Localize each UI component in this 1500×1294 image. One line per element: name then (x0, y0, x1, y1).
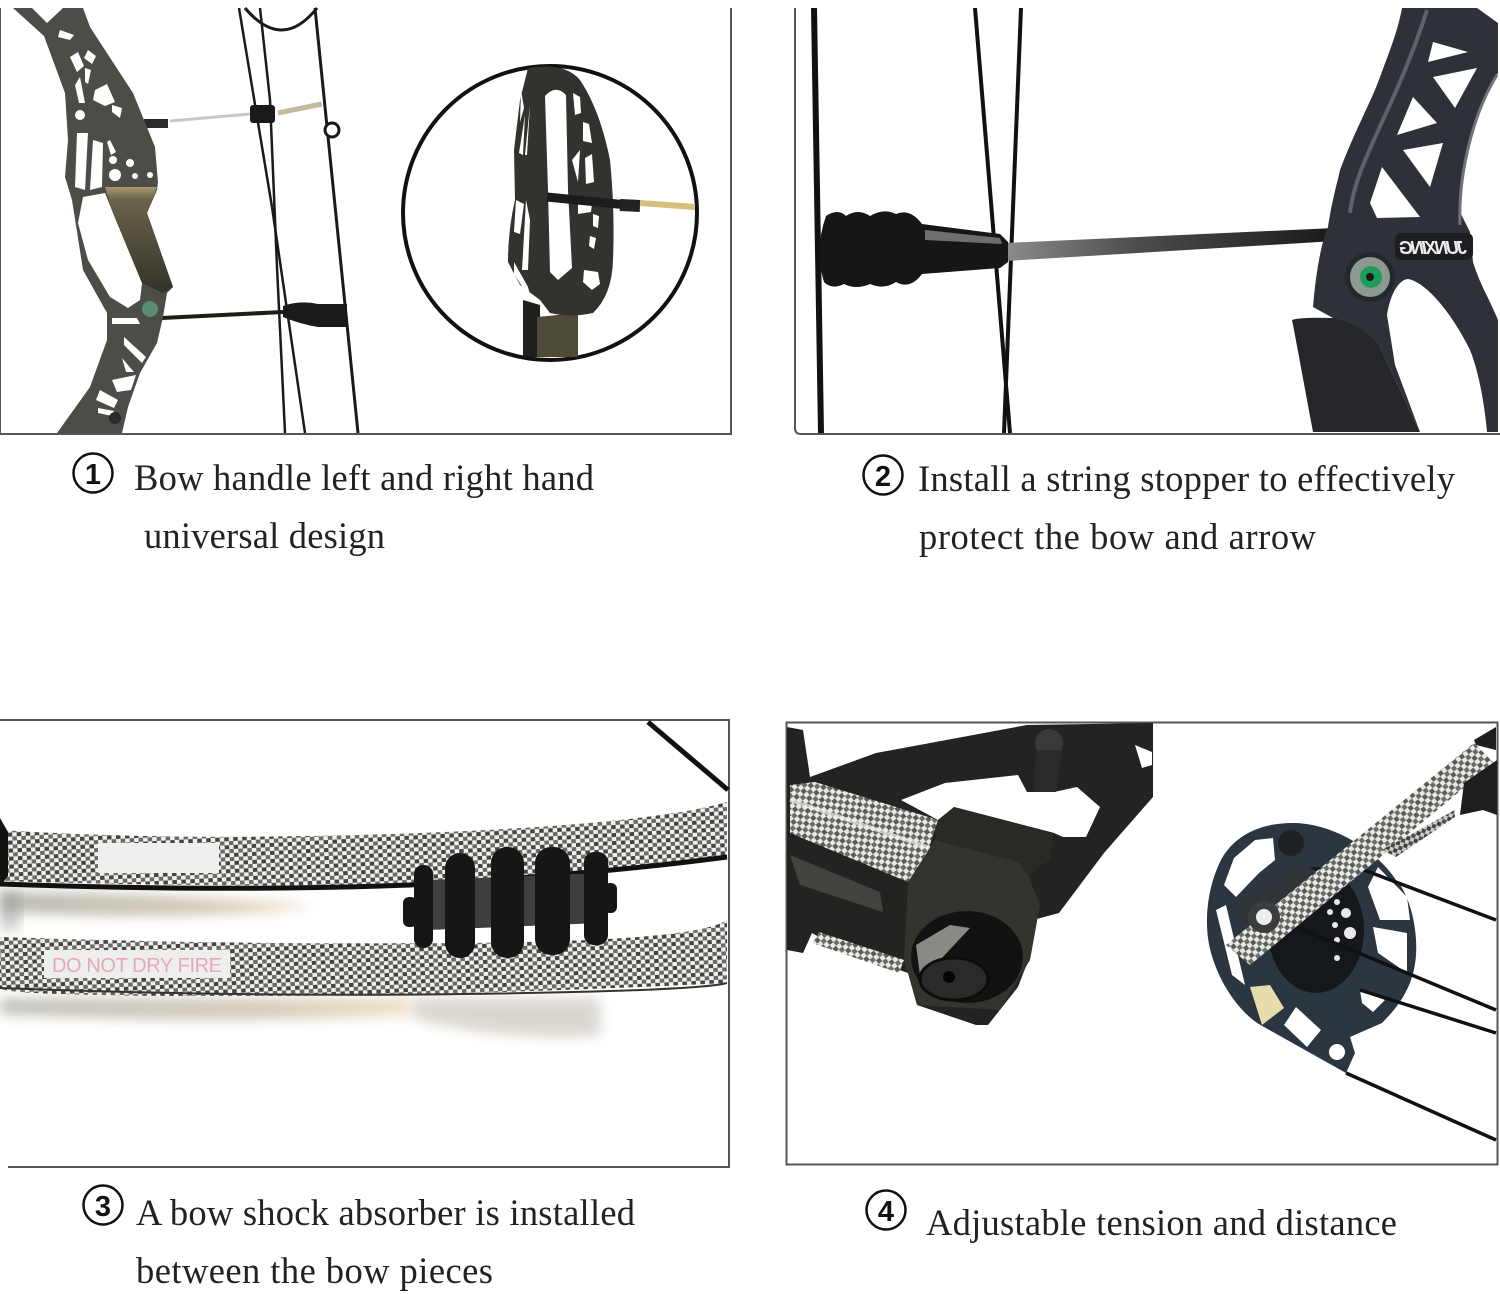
caption text 1: universal design (144, 515, 385, 556)
motion blur reflections (0, 890, 600, 1037)
number badge 1 (74, 454, 112, 492)
number badge 2: 2 (875, 461, 891, 493)
panel 2: string stopper photo (795, 8, 1500, 434)
caption text 1: Bow handle left and right hand (134, 457, 594, 498)
panel 4 frame (786, 722, 1498, 1164)
shock absorber (403, 847, 617, 958)
limb labels: DO NOT DRY FIRE (52, 955, 222, 977)
stopper rod (1006, 228, 1335, 261)
caption text 3 (136, 1192, 635, 1291)
bow riser: JUNXING (1399, 238, 1467, 258)
panel 2 frame (795, 8, 1500, 434)
caption 3 (84, 1186, 635, 1291)
inset circle with bow detail (403, 66, 697, 360)
cam wheel (1207, 823, 1416, 1073)
cam strings (1296, 870, 1496, 1140)
number badge 3 (84, 1186, 122, 1224)
number badge 1: 1 (85, 459, 101, 491)
limb (1226, 727, 1497, 965)
number badge 4: 4 (878, 1196, 894, 1228)
caption text 2: protect the bow and arrow (919, 516, 1317, 557)
caption text 3: between the bow pieces (136, 1250, 493, 1291)
caption text 4: Adjustable tension and distance (926, 1202, 1397, 1243)
panel 3 frame (0, 720, 729, 1167)
limb labels (44, 843, 230, 978)
panel 1 frame (0, 8, 731, 434)
bow strings (814, 8, 1021, 433)
string (648, 722, 728, 790)
bow riser (13, 8, 173, 433)
panel 1: bow handle photo (0, 8, 731, 434)
bow riser (1292, 8, 1498, 432)
caption text 2 (918, 458, 1456, 557)
caption text 1 (134, 457, 594, 556)
panel 4: tension and cam photo (786, 722, 1498, 1164)
number badge 2 (864, 456, 902, 494)
limb pocket close-up (787, 723, 1153, 1025)
upper stabilizer rod (144, 104, 339, 137)
upper limb (0, 802, 727, 888)
caption 2 (864, 456, 1456, 557)
bow strings (239, 8, 358, 433)
lower string stopper (162, 302, 347, 327)
panel 3: shock absorber photo (0, 720, 729, 1167)
lower limb (0, 920, 727, 996)
number badge 4 (866, 1190, 906, 1230)
rubber stopper (819, 211, 1008, 287)
number badge 3: 3 (95, 1191, 111, 1223)
caption 1 (74, 454, 594, 556)
caption 4 (866, 1190, 1397, 1243)
caption text 3: A bow shock absorber is installed (136, 1192, 635, 1233)
caption text 2: Install a string stopper to effectively (918, 458, 1456, 499)
